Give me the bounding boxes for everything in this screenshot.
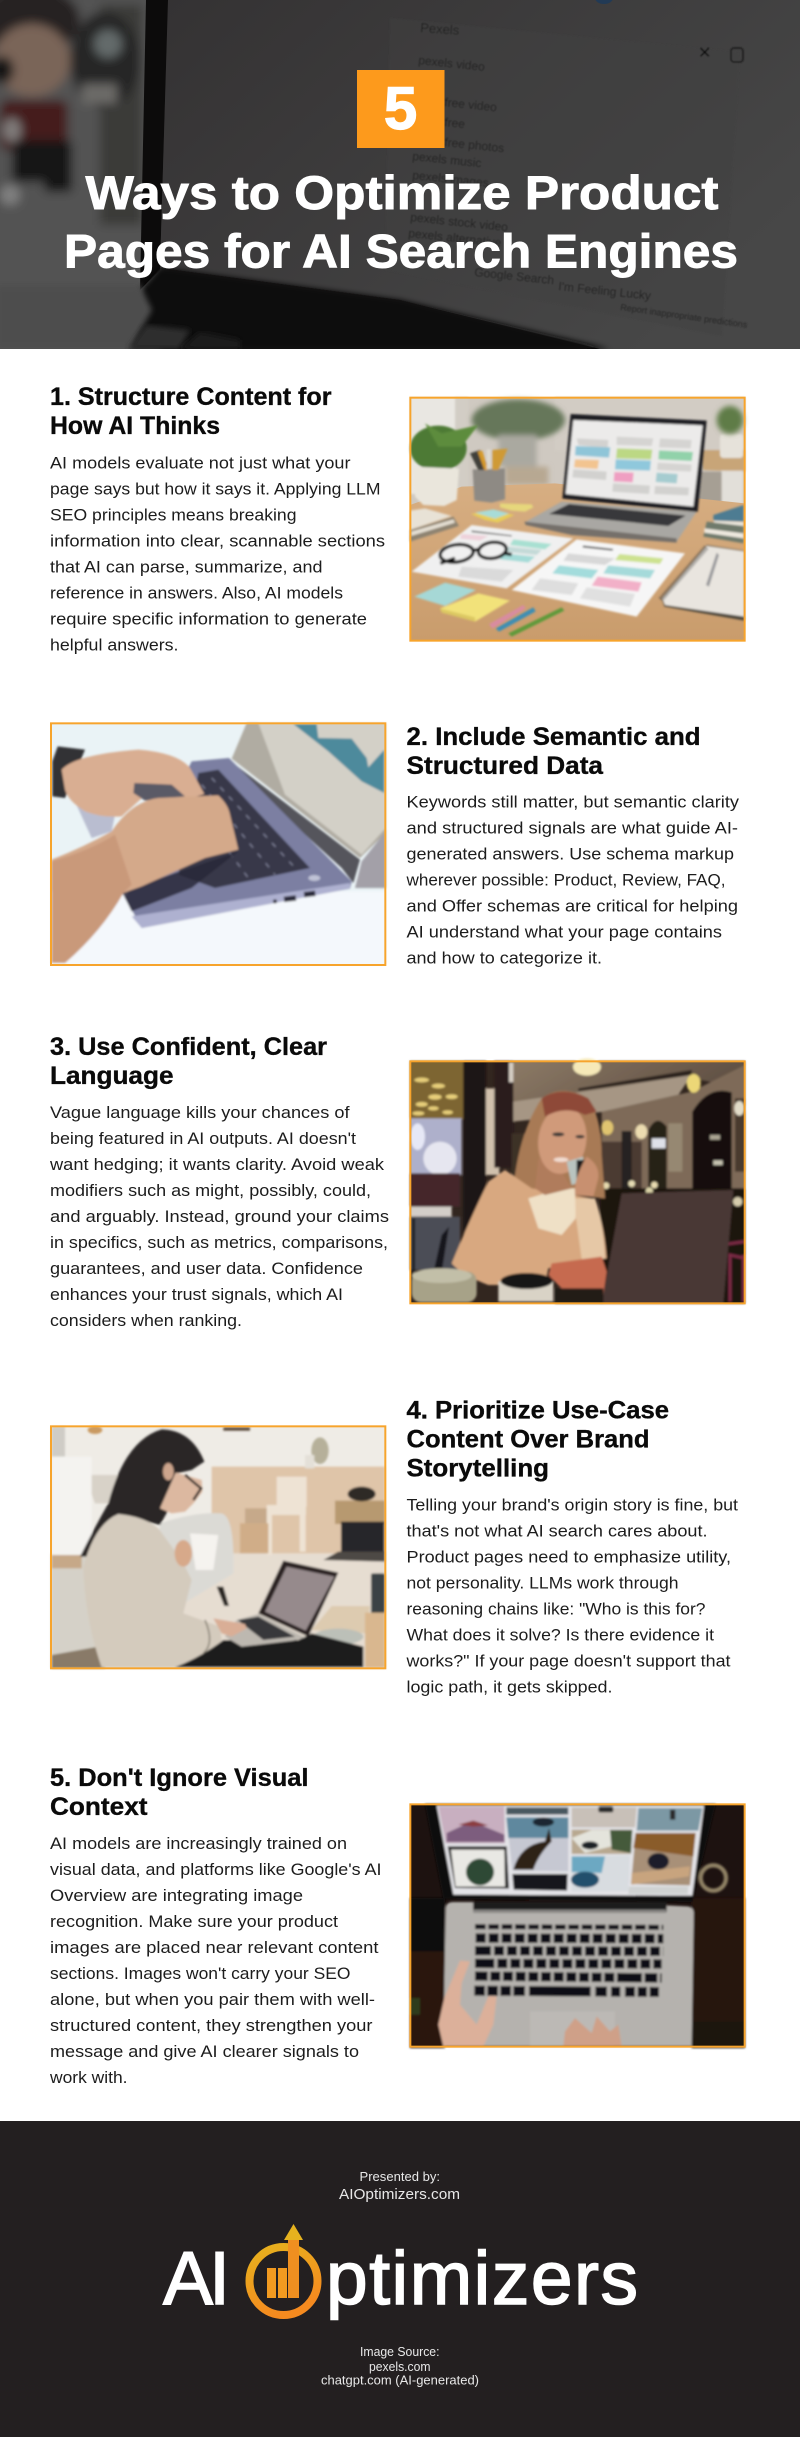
- presented by: [339, 2170, 460, 2203]
- laptop: [258, 1561, 338, 1637]
- keyboard rows: [474, 1927, 663, 1992]
- body text: tip 5: Overview are integrating image: [50, 1886, 303, 1905]
- scarf: [528, 1188, 576, 1235]
- laptop body: [443, 1902, 694, 2046]
- AI Optimizers logo: ptimizers: [326, 2236, 638, 2320]
- body text: tip 1: SEO principles means breaking: [50, 506, 296, 524]
- basket bag: [335, 1501, 385, 1524]
- image source credits: chatgpt.com (AI-generated): [321, 2374, 479, 2388]
- pale document under wrist: [76, 806, 116, 838]
- lamps: [573, 1058, 601, 1076]
- search dropdown in background screenshot: pexels alternative: [408, 226, 502, 250]
- heading: tip 1: 1. Structure Content for: [50, 383, 332, 411]
- sticky stack: [414, 583, 476, 606]
- hair: [80, 1429, 204, 1557]
- right books: [713, 505, 744, 522]
- body text: tip 5: [49, 1834, 381, 2087]
- search dropdown in background screenshot: I'm Feeling Lucky: [558, 279, 652, 303]
- heading: tip 5: [50, 1764, 308, 1821]
- search dropdown in background screenshot: Report inappropriate predictions: [620, 302, 748, 330]
- body text: tip 1: AI models evaluate not just what your: [50, 454, 351, 472]
- body text: tip 3: Vague language kills your chances of: [50, 1103, 350, 1122]
- body text: tip 5: structured content, they strengthen your: [50, 2016, 373, 2035]
- paper 1: [412, 525, 573, 588]
- body text: tip 1: [50, 454, 385, 654]
- body text: tip 4: Telling your brand's origin story is fine, but: [406, 1496, 738, 1514]
- presented by: Presented by:: [360, 2170, 440, 2184]
- number badge: [357, 70, 444, 148]
- image source credits: pexels.com: [369, 2360, 430, 2374]
- hands: [438, 1961, 497, 2046]
- AI Optimizers logo: AI: [163, 2236, 230, 2320]
- title: Ways to Optimize Product: [86, 166, 719, 219]
- body text: tip 3: [49, 1103, 389, 1330]
- heading: tip 4: Storytelling: [406, 1454, 549, 1482]
- body text: tip 5: recognition. Make sure your product: [50, 1912, 338, 1931]
- paper 2: [512, 539, 685, 617]
- panel: footer: [0, 2121, 800, 2437]
- body text: tip 1: information into clear, scannable sections: [50, 532, 385, 550]
- heading: tip 5: Context: [50, 1793, 148, 1821]
- body text: tip 4: not personality. LLMs work through: [406, 1574, 678, 1592]
- search dropdown in background screenshot: Google Search: [474, 265, 555, 287]
- tiles: [438, 1806, 505, 1843]
- body text: tip 1: page says but how it says it. Applying LLM: [50, 480, 380, 498]
- body text: tip 4: [405, 1496, 738, 1696]
- bezel: [425, 1804, 716, 1902]
- body text: tip 4: What does it solve? Is there evidence it: [406, 1626, 714, 1644]
- body text: tip 3: modifiers such as might, possibly, could,: [50, 1181, 371, 1200]
- pink chair: [726, 1238, 746, 1302]
- body text: tip 5: message and give AI clearer signals to: [50, 2042, 359, 2061]
- search dropdown in background screenshot: pexels images: [412, 168, 489, 190]
- body text: tip 1: helpful answers.: [50, 636, 178, 654]
- image source credits: [321, 2345, 479, 2388]
- watch: [52, 746, 85, 798]
- mug + hand: [175, 1540, 192, 1567]
- body text: tip 2: Keywords still matter, but semantic clarity: [406, 792, 740, 812]
- heading: tip 4: 4. Prioritize Use-Case: [406, 1396, 669, 1424]
- title: [64, 166, 738, 278]
- rug / pot / box: [312, 1606, 370, 1633]
- heading: tip 2: Structured Data: [406, 752, 604, 780]
- coil of tape: [701, 1865, 726, 1891]
- presented by: AIOptimizers.com: [339, 2186, 460, 2203]
- left books: [410, 508, 452, 530]
- heading: tip 2: 2. Include Semantic and: [406, 723, 700, 751]
- body text: tip 2: generated answers. Use schema markup: [406, 844, 734, 864]
- sweater: [83, 1514, 222, 1667]
- panel: tip 4: [51, 1396, 738, 1696]
- glass plate: [313, 1629, 363, 1645]
- body text: tip 2: and structured signals are what guide AI-: [406, 818, 738, 838]
- body text: tip 1: that AI can parse, summarize, and: [50, 558, 322, 576]
- hair back: [514, 1090, 607, 1200]
- spiral notebook: [662, 545, 744, 621]
- body text: tip 5: AI models are increasingly trained on: [50, 1834, 347, 1853]
- laptop: [524, 502, 697, 542]
- panel: tip 1: [50, 383, 745, 654]
- forearm hand: [548, 1257, 607, 1295]
- screen: [232, 723, 386, 858]
- body text: tip 2: AI understand what your page contains: [406, 922, 722, 942]
- body text: tip 4: logic path, it gets skipped.: [406, 1678, 612, 1696]
- panel: header: [0, 0, 800, 360]
- body text: tip 1: reference in answers. Also, AI models: [50, 584, 343, 602]
- heading: tip 4: [406, 1396, 669, 1482]
- search dropdown in background screenshot: free photos: [444, 135, 505, 155]
- heading: tip 1: How AI Thinks: [50, 412, 220, 440]
- heading: tip 3: Language: [50, 1062, 174, 1090]
- black skirt: [175, 1633, 363, 1667]
- body text: tip 5: work with.: [49, 2068, 128, 2087]
- panel: tip 2: [51, 723, 740, 968]
- search dropdown in background screenshot: free: [444, 115, 466, 131]
- body text: tip 3: enhances your trust signals, which AI: [50, 1285, 343, 1304]
- body text: tip 4: that's not what AI search cares about.: [406, 1522, 708, 1540]
- phone and hand: [567, 1157, 583, 1185]
- search dropdown in background screenshot: [408, 23, 747, 328]
- title: Pages for AI Search Engines: [64, 224, 738, 278]
- sweater: [452, 1170, 607, 1285]
- body text: tip 1: require specific information to generate: [50, 610, 367, 628]
- pencil cup: [473, 468, 505, 503]
- mug and jar: [498, 1277, 553, 1302]
- glasses: [439, 540, 512, 564]
- heading: tip 1: [50, 383, 332, 440]
- body text: tip 3: considers when ranking.: [50, 1311, 242, 1330]
- lower hand and arm: [52, 794, 240, 894]
- body text: tip 3: being featured in AI outputs. AI doesn't: [50, 1129, 356, 1148]
- search dropdown in background screenshot: ✕: [698, 45, 711, 62]
- heading: tip 3: 3. Use Confident, Clear: [50, 1033, 327, 1061]
- sofa: [155, 1513, 234, 1602]
- body text: tip 5: visual data, and platforms like Google's AI: [50, 1860, 382, 1879]
- search dropdown in background screenshot: pexels video: [418, 53, 486, 74]
- sticky notes: [500, 503, 533, 512]
- hand on keys: [213, 1618, 247, 1637]
- shadow under hands: [122, 851, 238, 911]
- body text: tip 3: and arguably. Instead, ground your claims: [50, 1207, 389, 1226]
- search dropdown in background screenshot: free video: [444, 95, 498, 115]
- photo: desk with laptop and documents: [410, 397, 745, 641]
- panel: tip 5: [49, 1764, 745, 2087]
- laptop: [602, 1190, 733, 1303]
- image source credits: Image Source:: [360, 2345, 440, 2359]
- body text: tip 3: want hedging; it wants clarity. Avoid weak: [49, 1155, 385, 1174]
- body text: tip 2: and how to categorize it.: [406, 948, 602, 968]
- chair: [267, 1477, 307, 1555]
- photo: hands typing on laptop: [51, 723, 386, 965]
- body text: tip 2: wherever possible: Product, Review, FAQ,: [405, 870, 726, 890]
- heading: tip 2: [406, 723, 700, 780]
- logo icon: gauge circle with bars and arrow: [250, 2224, 318, 2315]
- number badge: 5: [384, 75, 417, 142]
- photo: woman with laptop and mug on floor: [51, 1426, 386, 1668]
- photo: woman on phone at cafe with laptop: [410, 1058, 745, 1303]
- upper hand: [62, 750, 204, 817]
- left plant: [410, 426, 467, 471]
- heading: tip 3: [50, 1033, 327, 1090]
- body text: tip 3: guarantees, and user data. Confidence: [50, 1259, 363, 1278]
- search dropdown in background screenshot: Pexels: [420, 20, 460, 38]
- search dropdown in background screenshot: pexels stock video: [410, 210, 509, 234]
- body text: tip 4: Product pages need to emphasize utility,: [406, 1548, 731, 1566]
- AI Optimizers logo: [163, 2224, 638, 2320]
- base: [125, 758, 352, 928]
- photo: overhead laptop with image gallery: [410, 1804, 745, 2048]
- pencils: [489, 605, 526, 629]
- face: [160, 1473, 202, 1513]
- search dropdown in background screenshot: pexels music: [412, 149, 482, 170]
- header background photo: [0, 0, 800, 360]
- body text: tip 4: reasoning chains like: "Who is this for?: [406, 1600, 706, 1618]
- screen: [437, 1805, 704, 1896]
- body text: tip 2: and Offer schemas are critical for helping: [406, 896, 738, 916]
- panel: tip 3: [49, 1033, 745, 1330]
- body text: tip 2: [405, 792, 740, 968]
- body text: tip 5: images are placed near relevant content: [50, 1938, 379, 1957]
- body text: tip 3: in specifics, such as metrics, comparisons,: [50, 1233, 388, 1252]
- heading: tip 5: 5. Don't Ignore Visual: [50, 1764, 308, 1792]
- neck and face: [537, 1186, 570, 1196]
- body text: tip 4: works?" If your page doesn't support that: [405, 1652, 731, 1670]
- heading: tip 4: Content Over Brand: [406, 1426, 650, 1454]
- body text: tip 5: alone, but when you pair them with well-: [50, 1990, 375, 2009]
- body text: tip 5: sections. Images won't carry your SEO: [50, 1964, 350, 1983]
